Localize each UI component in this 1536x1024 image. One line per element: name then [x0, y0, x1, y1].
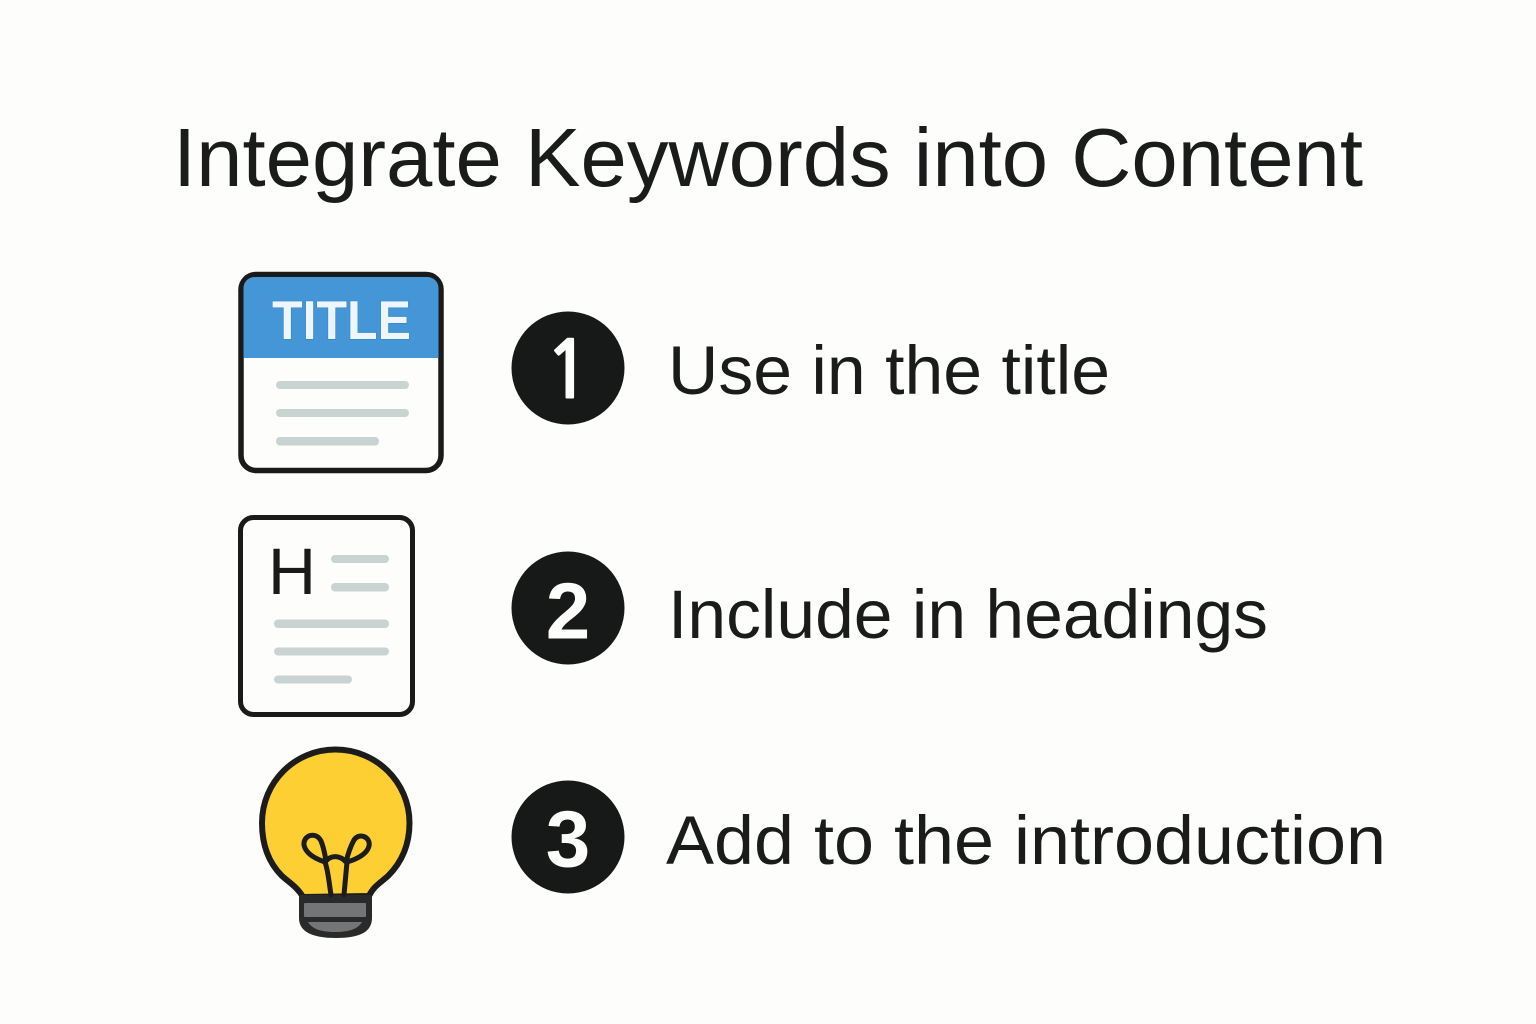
- title: Integrate Keywords into Content: [173, 111, 1363, 204]
- icon: light bulb: [262, 750, 410, 936]
- icon: title document: [241, 274, 441, 470]
- step 1 label: Use in the title: [668, 332, 1110, 409]
- badge: number 2: [512, 552, 624, 664]
- step 3 label: Add to the introduction: [666, 802, 1386, 879]
- badge: number 3: [512, 780, 624, 894]
- badge: number 1: 1: [544, 332, 592, 410]
- badge: number 1: [512, 312, 624, 424]
- icon: heading document: H: [268, 534, 316, 608]
- step 2 label: Include in headings: [668, 576, 1268, 653]
- badge: number 2: 2: [546, 566, 590, 656]
- icon: title document: TITLE: [272, 289, 411, 351]
- icon: heading document: [240, 518, 412, 714]
- badge: number 3: 3: [546, 794, 590, 884]
